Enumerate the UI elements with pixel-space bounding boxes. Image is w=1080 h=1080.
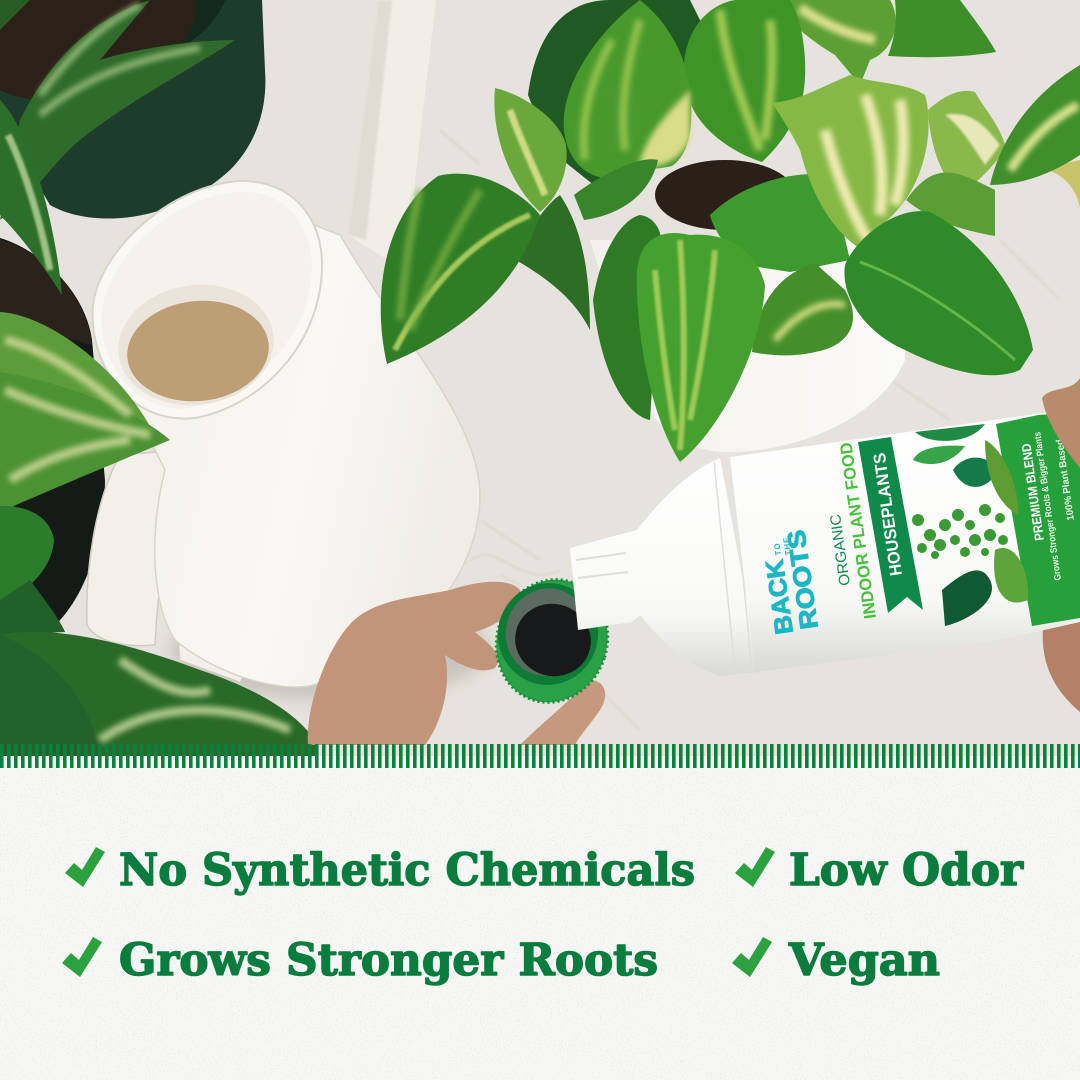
liquid in cap (506, 594, 600, 686)
right hand top (1042, 378, 1080, 468)
bottle body (730, 412, 1080, 672)
marble countertop (0, 0, 1080, 756)
benefit: no synthetic chemicals: No Synthetic Chemicals (119, 845, 695, 896)
plants on label (913, 424, 1028, 626)
check icon (732, 937, 772, 977)
can top rim (93, 181, 322, 419)
pilea dots (912, 504, 1008, 559)
left hand (308, 582, 605, 745)
top-left leaves (0, 0, 235, 220)
pothos plant (381, 0, 1080, 462)
leaf top centre (790, 0, 896, 78)
leaf far right (990, 65, 1080, 185)
leaf long front (637, 233, 765, 462)
marble veining (440, 130, 1060, 730)
post shading (348, 0, 392, 240)
label text: PREMIUM BLEND (1018, 443, 1047, 542)
leaf small stem (516, 195, 590, 330)
leaf right top pale small (928, 90, 1005, 182)
leaf top right pale (888, 0, 996, 57)
bottom-left leaf (0, 632, 318, 756)
label text: TO (772, 543, 783, 556)
shadow under can (166, 630, 494, 705)
water surface (127, 300, 269, 402)
leaf central dark (574, 159, 658, 220)
benefit: vegan: Vegan (788, 935, 940, 986)
can body (129, 200, 480, 687)
label text: INDOOR PLANT FOOD (836, 441, 880, 620)
left mid leaves (0, 312, 152, 430)
leaf big right (844, 211, 1033, 375)
leaf left mid (494, 88, 567, 212)
label green band (996, 412, 1080, 626)
leaf small lower right (906, 172, 995, 236)
top-left dark pot (0, 0, 265, 219)
benefit: low odor: Low Odor (789, 845, 1024, 896)
leaf: back dark (528, 0, 700, 183)
watering can (87, 181, 480, 687)
benefit: grows stronger roots: Grows Stronger Roots (119, 935, 658, 986)
leaf variegated centre-right (772, 75, 929, 250)
label text: HOUSEPLANTS (870, 452, 906, 577)
fabric panel (0, 756, 1080, 1080)
leaf: far right edge (1050, 160, 1080, 208)
leaf lower dark (593, 215, 662, 420)
label text: Grows Stronger Roots & Bigger Plants (1032, 431, 1064, 581)
right hand bottom (1043, 622, 1080, 712)
photo scene (0, 0, 1080, 756)
check icon (735, 847, 775, 887)
check icon (62, 937, 102, 977)
leaf upper heart (564, 0, 691, 178)
label text: 100% Plant Based (1055, 438, 1077, 521)
leaf mid right (710, 174, 850, 272)
left foliage (0, 0, 318, 756)
leaf large left (381, 174, 540, 364)
green bottle cap (481, 565, 623, 717)
leaf centre tall (684, 0, 805, 162)
leaf lower centre (752, 263, 853, 355)
label text: ORGANIC (827, 513, 854, 587)
label text: BACK (761, 558, 799, 636)
label text: THE (781, 536, 793, 556)
label text (761, 431, 1077, 636)
label text: ROOTS (782, 528, 824, 631)
stitched green stripe (0, 744, 1080, 768)
can opening (118, 284, 274, 406)
plant soil (655, 160, 795, 230)
check icon (65, 847, 105, 887)
bottle (570, 412, 1080, 676)
can handle (86, 452, 164, 646)
houseplants ribbon (858, 437, 923, 613)
white pot under plant (590, 240, 905, 452)
left black pot with soil (0, 238, 105, 630)
bottle neck and shoulders (570, 458, 760, 676)
white post (352, 0, 436, 258)
